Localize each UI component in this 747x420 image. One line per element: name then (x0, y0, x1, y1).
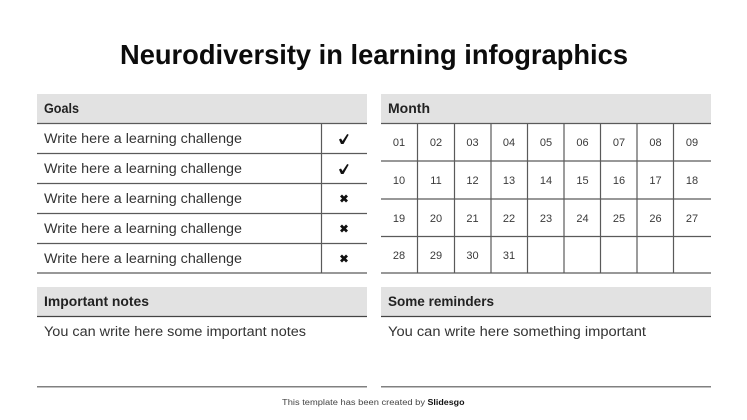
calendar dates: 13 (503, 175, 515, 187)
calendar dates: 07 (613, 137, 625, 149)
footer credit: This template has been created by (282, 398, 425, 407)
goals row 5 (44, 251, 347, 266)
reminders header (381, 287, 711, 316)
calendar dates: 22 (503, 213, 515, 225)
calendar dates: 19 (393, 213, 405, 225)
goals row 3 (44, 191, 347, 206)
calendar dates: 29 (430, 250, 442, 262)
title: Neurodiversity in learning infographics (120, 39, 628, 70)
goals row 3: Write here a learning challenge (44, 191, 242, 206)
panel: some reminders (381, 287, 711, 387)
goals row 5: Write here a learning challenge (44, 251, 242, 266)
calendar dates: 16 (613, 175, 625, 187)
calendar dates: 26 (649, 213, 662, 225)
goals row 1 (44, 131, 349, 146)
calendar dates: 28 (393, 250, 405, 262)
calendar dates: 06 (576, 137, 589, 149)
reminders header: Some reminders (388, 294, 494, 309)
calendar dates: 01 (393, 137, 405, 149)
goals header: Goals (44, 101, 79, 116)
calendar dates: 31 (503, 250, 515, 262)
calendar dates: 12 (466, 175, 479, 187)
calendar dates: 25 (613, 213, 625, 225)
calendar dates: 27 (686, 213, 698, 225)
calendar dates: 24 (576, 213, 589, 225)
month header (381, 94, 711, 123)
calendar dates: 08 (649, 137, 662, 149)
goals row 4: Write here a learning challenge (44, 221, 242, 236)
calendar dates (393, 137, 698, 262)
calendar dates: 10 (393, 175, 405, 187)
goals row lines (37, 123, 367, 273)
calendar dates: 15 (576, 175, 589, 187)
notes header: Important notes (44, 294, 149, 309)
calendar dates: 14 (540, 175, 552, 187)
notes header (37, 287, 367, 316)
calendar dates: 30 (466, 250, 479, 262)
reminders text: You can write here something important (388, 324, 646, 339)
notes text: You can write here some important notes (44, 324, 306, 339)
calendar dates: 02 (430, 137, 442, 149)
calendar dates: 04 (503, 137, 515, 149)
calendar dates: 18 (686, 175, 698, 187)
calendar dates: 20 (430, 213, 442, 225)
panel: goals (37, 94, 367, 273)
goals row 2: Write here a learning challenge (44, 161, 242, 176)
footer credit: Slidesgo (428, 398, 465, 407)
calendar dates: 05 (540, 137, 552, 149)
footer credit (282, 398, 465, 407)
goals row 2 (44, 161, 349, 176)
calendar dates: 21 (466, 213, 479, 225)
goals header (37, 94, 367, 123)
calendar dates: 11 (430, 175, 442, 187)
calendar grid (381, 123, 711, 273)
calendar dates: 09 (686, 137, 698, 149)
calendar dates: 03 (466, 137, 479, 149)
calendar dates: 23 (540, 213, 552, 225)
goals row 1: Write here a learning challenge (44, 131, 242, 146)
goals row 4 (44, 221, 347, 236)
panel: month calendar (381, 94, 711, 273)
month header: Month (388, 101, 430, 116)
panel: important notes (37, 287, 367, 387)
calendar dates: 17 (649, 175, 662, 187)
